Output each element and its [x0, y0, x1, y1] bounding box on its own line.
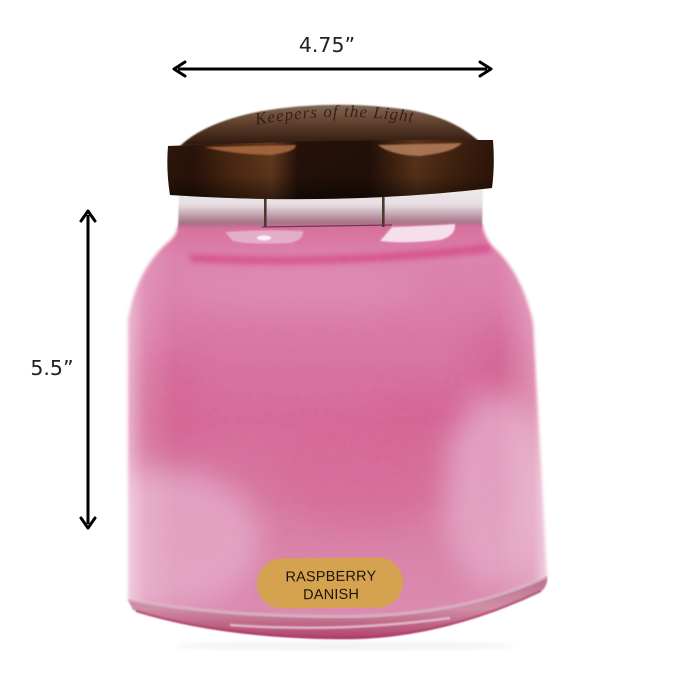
wax surface line: [262, 225, 392, 227]
candle jar: [126, 189, 548, 650]
wax body: [126, 222, 548, 616]
wicks: [264, 197, 385, 227]
glass edge haze: [126, 252, 548, 602]
lid dome: [180, 105, 482, 146]
width label: 4.75”: [299, 33, 355, 57]
copper lid: [167, 104, 494, 200]
lid rim shine: [205, 145, 296, 155]
jar base rim: [128, 577, 547, 639]
wax surface highlights: [225, 224, 455, 244]
height label: 5.5”: [30, 356, 74, 380]
glass neck: [178, 188, 483, 230]
contact shadow: [175, 642, 515, 650]
lid engraved text: Keepers of the Light: [256, 105, 414, 125]
width arrow: [174, 62, 491, 76]
label: scent name: DANISH: [303, 587, 359, 603]
lid rim: [167, 140, 494, 199]
label: scent name: [257, 557, 403, 609]
label: scent name: RASPBERRY: [285, 569, 377, 585]
height arrow: [81, 211, 95, 528]
wax mottling: [70, 220, 555, 620]
